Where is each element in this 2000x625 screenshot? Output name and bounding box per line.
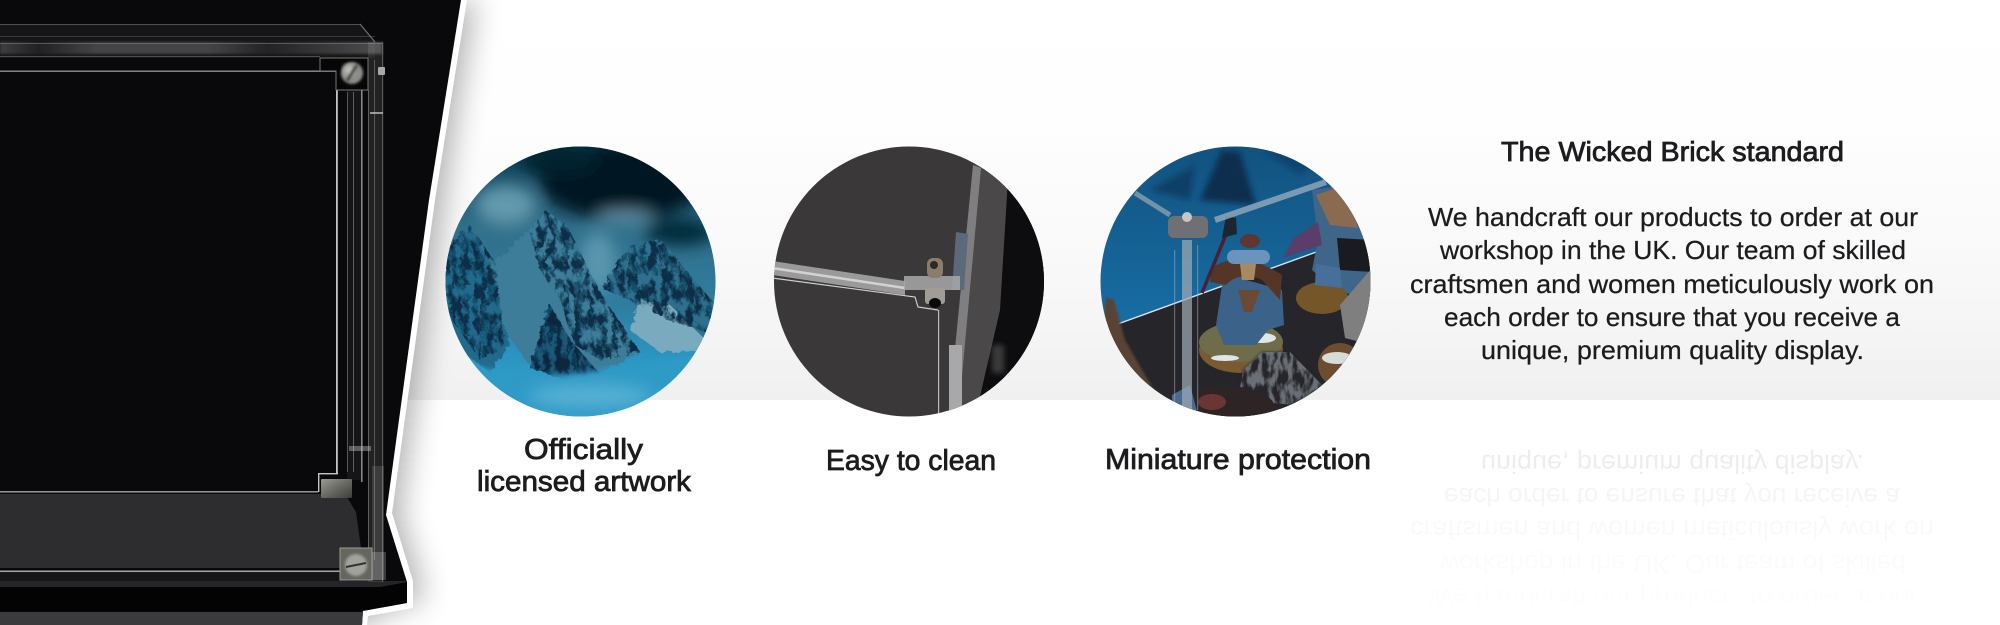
panel: display case photo [0,0,467,625]
dark backing [773,146,1045,418]
wolf figure left [1103,296,1155,390]
white panel border [0,0,467,625]
panel drop shadow [0,0,475,625]
text block: standard description: unique, premium quality display. [1481,335,1864,365]
acrylic side pillars [318,42,384,582]
bottom corner screw [340,548,386,580]
label: miniature protection: Miniature protection [1105,444,1371,476]
text block: standard description [1410,202,1934,365]
text block: standard description: craftsmen and women meticulously work on [1410,269,1934,299]
label: officially licensed artwork: licensed artwork [477,466,692,498]
mountains dark texture [445,211,716,382]
mirrored text reflection: craftsmen and women meticulously work on [1410,515,1934,545]
mountains light base [445,211,716,382]
display base [0,491,407,625]
fur wolf [1240,352,1322,405]
acrylic lid [0,24,382,72]
foreground figures [1172,385,1274,416]
rear metal block [321,479,352,498]
sky [445,146,717,418]
label: officially licensed artwork: Officially [524,434,644,466]
mirrored text reflection [1410,449,1934,612]
label: officially licensed artwork [477,434,692,498]
floor line [1118,251,1316,324]
storm clouds [476,144,716,292]
text block: standard description: each order to ensure that you receive a [1444,302,1901,332]
snowfield [472,350,696,416]
text block: standard description: workshop in the UK. Our team of skilled [1439,235,1906,265]
corner screw [925,258,945,308]
display floor [1100,238,1372,418]
side panel [954,164,1044,409]
acrylic corner [1135,182,1326,412]
backdrop mountain [1150,150,1330,205]
circle photo: miniatures [1100,146,1372,430]
mirrored text reflection: each order to ensure that you receive a [1444,482,1901,512]
dark photo background [0,0,461,625]
horizontal acrylic edge [772,261,960,310]
miniature base [1199,322,1283,373]
text block: standard description: We handcraft our products to order at our [1428,202,1918,232]
right miniatures [1283,185,1372,387]
circle photo: mountain artwork [445,144,717,418]
top corner screw [320,58,385,90]
vertical acrylic edge [938,165,981,420]
blue backdrop [1100,146,1372,418]
circle photo: acrylic corner [772,146,1046,420]
heading: The Wicked Brick standard: The Wicked Brick standard [1501,136,1844,167]
main miniature [1202,216,1284,345]
label: easy to clean: Easy to clean [826,445,996,477]
mirrored text reflection: unique, premium quality display. [1481,449,1864,479]
